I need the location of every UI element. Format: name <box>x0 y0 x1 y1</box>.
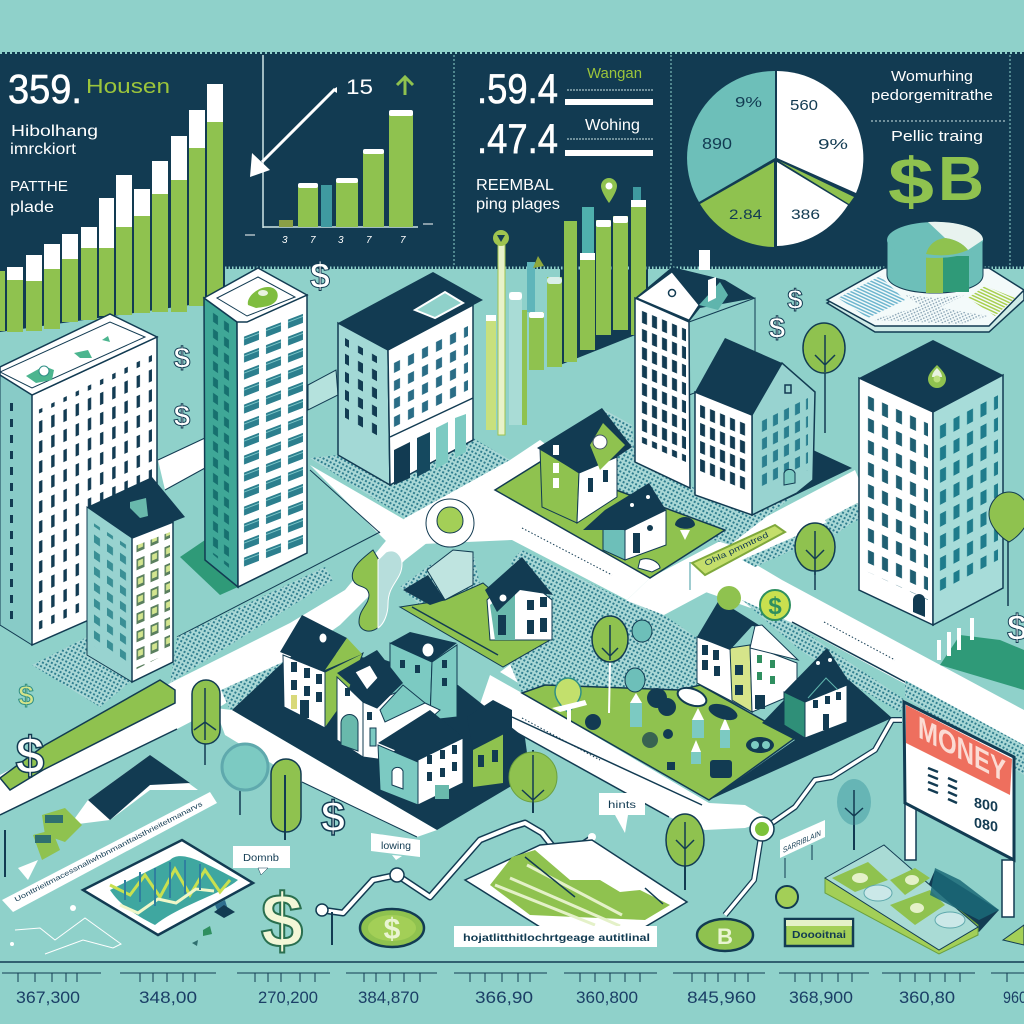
data chart panel left <box>83 840 253 935</box>
billboard MONEY: 080 <box>974 814 998 835</box>
callout hints: hints <box>608 800 636 811</box>
pie chart: 560 <box>790 97 818 114</box>
dollar icons <box>16 255 1024 842</box>
dollar icons: $ <box>769 312 786 345</box>
line chart path right <box>725 720 902 915</box>
tree lower center <box>509 750 557 813</box>
headline statistic left: Housen <box>86 76 170 98</box>
garden path behind tower <box>308 370 338 410</box>
green house <box>537 408 632 523</box>
dollar icons: $ <box>787 284 803 315</box>
axis labels: 845,960 <box>687 988 756 1007</box>
tower shadow <box>180 540 238 595</box>
bar chart middle <box>486 187 646 430</box>
coin bottom right <box>697 919 753 951</box>
peaked tall building <box>635 250 755 488</box>
pie chart: 9% <box>735 94 762 111</box>
pie chart: 2.84 <box>729 206 762 222</box>
text block right <box>871 68 1007 218</box>
tree teal <box>222 744 268 815</box>
lawn decorations <box>552 620 774 778</box>
green road sign <box>690 525 785 590</box>
wide caption label: hojatlitthitlochrtgeage autitlinal <box>463 933 650 944</box>
axis baseline <box>0 962 1024 982</box>
billboard MONEY <box>904 702 1014 917</box>
statistics middle: ping plages <box>476 196 560 213</box>
axis labels <box>16 988 1024 1007</box>
small road sign: SARRIBLAIN <box>783 828 821 855</box>
green label box <box>785 919 853 946</box>
arrow down-left <box>250 87 337 177</box>
line chart path left <box>316 823 596 945</box>
tree round top right <box>803 323 845 433</box>
long label strip: Uonttrieitmacessnaliwhbnmanttaisthrieitetmanarvs <box>14 801 204 904</box>
pie chart: 386 <box>791 206 820 222</box>
money stack <box>825 845 999 954</box>
callout Domnb <box>233 846 290 875</box>
text block right: $ <box>888 144 934 218</box>
small bar chart with arrow: 3 <box>338 235 344 246</box>
roads <box>0 438 1024 837</box>
small dark-roof building <box>87 477 185 682</box>
tree chart area <box>666 814 704 890</box>
tree tall green <box>271 759 301 840</box>
lower green lot <box>522 680 892 800</box>
green boxes cluster left <box>5 808 82 880</box>
axis labels: 366,90 <box>475 988 533 1007</box>
callout lowing <box>371 833 420 860</box>
tree teal right <box>837 779 871 850</box>
statistics middle: Wohing <box>585 117 640 134</box>
map pin small <box>601 178 617 203</box>
thin line doodle <box>10 900 235 954</box>
lawn strip left <box>0 680 175 790</box>
building left large <box>0 314 157 645</box>
small bar chart with arrow: 3 <box>282 235 288 246</box>
bar chart left <box>0 84 223 332</box>
text block right: Womurhing <box>891 68 973 85</box>
pitched roof building <box>695 338 852 515</box>
pie chart: 890 <box>702 136 732 153</box>
coin bottom right: B <box>717 924 733 949</box>
coin bottom left: $ <box>384 913 401 946</box>
right tall building <box>859 340 1003 625</box>
headline statistic left: PATTHE <box>10 178 68 195</box>
coin dollar on road: $ <box>768 593 782 620</box>
headline statistic left <box>8 66 170 216</box>
small bar chart with arrow: 7 <box>400 235 406 246</box>
label 15 with up arrow: 15 <box>346 76 373 99</box>
dark statistics panel <box>0 52 1024 365</box>
map document <box>827 268 1024 332</box>
statistics middle: Wangan <box>587 65 642 82</box>
coin dollar on road <box>760 590 790 620</box>
headline statistic left: 359. <box>8 66 82 112</box>
building with dark roof center <box>338 272 483 485</box>
dark house block <box>232 583 550 830</box>
headline statistic left: imrckiort <box>10 141 77 158</box>
tree edge right <box>989 492 1024 606</box>
label 15 with up arrow <box>346 76 413 99</box>
house dark roof lower right <box>784 648 850 738</box>
dollar icons: $ <box>16 727 45 785</box>
axis labels: 368,900 <box>789 988 853 1007</box>
statistics middle: .59.4 <box>477 65 558 112</box>
striped chart panel <box>465 840 687 927</box>
callout Domnb: Domnb <box>243 853 279 864</box>
lawn pin and tree mid <box>352 499 474 631</box>
dollar icons: $ <box>174 400 191 433</box>
dollar icons: $ <box>174 342 191 375</box>
billboard MONEY: 800 <box>974 794 998 815</box>
dollar icons: $ <box>18 680 34 711</box>
fence spikes right <box>937 618 1024 690</box>
tree lot <box>592 616 628 713</box>
axis labels: 270,200 <box>258 988 318 1007</box>
pie chart: 9% <box>818 136 848 153</box>
green road sign: Ohla pmmtred <box>703 530 770 568</box>
small road sign <box>780 820 825 878</box>
callout lowing: lowing <box>381 841 411 852</box>
shrub with lamp <box>638 517 695 572</box>
statistics middle: .47.4 <box>477 115 558 162</box>
dollar icons: $ <box>321 793 345 842</box>
hatched pavements <box>32 410 1024 775</box>
text block right: Pellic traing <box>891 128 983 145</box>
small house upper cluster <box>403 550 553 640</box>
small bar chart with arrow <box>245 55 433 246</box>
green note corner <box>1003 925 1024 945</box>
tower building <box>204 268 307 587</box>
long label strip <box>2 792 217 912</box>
headline statistic left: plade <box>10 199 54 216</box>
small bar chart with arrow: 7 <box>310 235 316 246</box>
callout hints <box>599 793 645 833</box>
headline statistic left: Hibolhang <box>11 123 98 140</box>
tree near road right <box>795 523 835 590</box>
axis labels: 384,870 <box>358 988 419 1007</box>
statistics middle: REEMBAL <box>476 177 554 194</box>
cylinder chart <box>887 222 983 293</box>
dark diamond roof <box>70 755 198 825</box>
dollar icons: $ <box>310 255 330 296</box>
axis labels: 348,00 <box>139 988 197 1007</box>
axis labels: 360,800 <box>576 988 638 1007</box>
green ball <box>776 886 798 908</box>
pie chart <box>687 71 863 247</box>
houses cluster <box>280 615 512 805</box>
green label box: Doooitnai <box>792 930 846 941</box>
yellow-green house <box>697 586 798 712</box>
small teal house <box>583 483 666 560</box>
large dollar sign green: $ <box>261 879 303 964</box>
text block right: pedorgemitrathe <box>871 87 993 104</box>
statistics middle <box>476 65 653 213</box>
tree thin left <box>192 680 220 765</box>
axis labels: 367,300 <box>16 988 80 1007</box>
small bar chart with arrow: 7 <box>366 235 372 246</box>
axis labels: 360,80 <box>899 988 955 1007</box>
coin bottom left <box>360 909 424 947</box>
text block right: B <box>938 145 984 214</box>
green house lot <box>495 462 725 578</box>
wide caption label <box>454 926 657 947</box>
map pin on pole <box>493 230 509 435</box>
